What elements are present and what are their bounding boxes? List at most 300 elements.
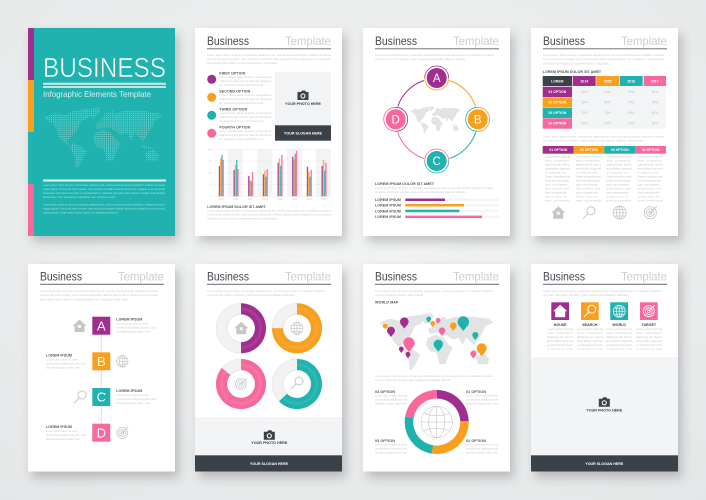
intro text: Ut enim ad minim veniam, quis nostrud exercitation ullamco laboris nisi ut aliquip ex ea commodo [207,57,331,61]
option column text: amet finibus, fuga sed [638,166,663,170]
option list: SECOND OPTION [219,90,251,94]
slogan bar: YOUR SLOGAN HERE [284,131,323,135]
option column text: ante pretium, sed [606,186,631,190]
option column text: ipsum dolor sit [638,194,660,198]
donut: search 63% [272,359,322,409]
data table: 15% [604,111,611,115]
option list: adipiscing elit. Donec lobortis faucibus [219,97,272,101]
intro text: Lorem ipsum dolor sit amet, consectetur adipiscing elit, sed do eiusmod tempor incididunt ut labore [543,53,664,57]
world map with pins [380,313,493,370]
option column text: Fusce in faucibus erat [606,174,632,178]
header: Template [285,34,331,48]
bar chart: 0 [210,195,212,198]
icon tile: search [581,302,599,320]
slogan bar [195,455,342,472]
option list: adipiscing elit. Donec lobortis faucibus [219,115,272,119]
data table: 60% [581,101,588,105]
option 02 label [466,439,498,454]
dotted world map [45,107,163,167]
data table: 35% [652,122,658,126]
data table: 65% [652,90,658,94]
bar chart [208,148,331,201]
slogan bar: YOUR SLOGAN HERE [585,462,624,466]
chart caption text [207,209,332,221]
world map [411,106,460,134]
slogan bar [531,455,678,472]
tile text: in faucibus erat [547,347,573,351]
tile text: ex placerat nisl. Fusce [577,343,603,347]
option column text: Lorem ipsum dolor sit [576,154,601,158]
option 03 label: consectetur adipiscing elit [375,446,407,450]
panel: icons page [531,264,678,472]
chart caption text: Ut enim ad minim veniam, quis nostrud exercitation ullamco laboris nisi ut aliquip ex ea commodo [207,213,332,217]
tile text: in faucibus erat [636,347,662,351]
option column text: ex placerat nisl. [638,170,660,174]
tile text: Lorem ipsum dolor sit [547,327,573,331]
header: Template [621,34,667,48]
map note: Ut enim ad minim veniam, quis nostrud exercitation ullamco [375,378,451,382]
bar chart: 2016 [306,198,312,201]
slogan bar: YOUR SLOGAN HERE [250,462,289,466]
tile text: amet, consectetur [547,331,573,335]
tile labels: HOUSE [554,323,567,327]
option column text: adipiscing elit. Sed ut [576,162,601,166]
photo placeholder [195,417,342,455]
chart caption text: Lorem ipsum dolor sit amet, consectetur adipiscing elit, sed do eiusmod tempor incididunt ut labore [207,209,332,213]
section text: Ut enim ad minim veniam, quis nostrud exercitation ullamco laboris [375,190,466,194]
option column headers: 04 OPTION [642,148,660,152]
node D: D [392,114,400,126]
option 03 label: 03 OPTION [375,439,395,443]
step text B [46,354,86,369]
segmented donut [405,390,469,454]
tile text: amet finibus, fuga sed [606,339,632,343]
data table: 45% [604,90,611,94]
option column text: amet consectetur [576,198,601,202]
tile text [547,327,662,351]
step text B: LOREM IPSUM [46,354,72,358]
tile text: ex placerat nisl. Fusce [547,343,573,347]
intro text: Ut enim ad minim veniam, quis nostrud exercitation ullamco laboris [375,57,466,61]
option column text: amet, consectetur [576,158,600,162]
globe icon [419,404,455,440]
option list: ac pharetra risus sed rhoncus [219,119,264,123]
intro text [207,289,325,297]
step text D [46,425,86,441]
tile text: ex placerat nisl. Fusce [606,343,632,347]
cover subtitle: Infographic Elements Template [43,89,151,99]
step text A [116,318,157,334]
cycle diagram [383,65,491,174]
option column text: amet, consectetur [545,158,569,162]
option 03 label: Lorem ipsum dolor sit amet [375,442,407,446]
tile text: amet finibus, fuga sed [636,339,662,343]
option column text: Lorem ipsum dolor sit [606,154,632,158]
header: Business [375,34,417,48]
option 01 label [466,390,498,406]
intro text: Duis aute irure dolor in reprehenderit in voluptate [207,61,277,65]
tile text: adipiscing elit. Sed ut [636,335,662,339]
option column text: diam volutpat nibh [638,190,660,194]
panel: options page [195,28,342,236]
header [40,270,164,285]
step text B: faucibus augue diam nec [46,365,81,369]
option column text: adipiscing elit. Sed ut [638,162,663,166]
header [375,270,499,285]
option column text: fusce semper augue [606,178,631,182]
option 01 label: 01 OPTION [466,390,486,394]
header: Business [375,270,417,284]
map heading: WORLD MAP [375,300,399,304]
cover body text: Excepteur sint occaecat cupidatat non proident sunt [43,195,115,199]
option column text: amet consectetur [638,198,662,202]
step text B: consectetur adipiscing elit. Sed [46,361,86,365]
step text D: consectetur adipiscing elit. Sed [46,433,86,437]
icon tile: house [551,302,569,320]
option list: Lorem ipsum dolor sit amet, consectetur [219,75,271,79]
option column text: diam volutpat nibh [545,190,567,194]
option 03 label: faucibus augue diam nec [375,450,407,454]
option column text: ex placerat nisl. [576,170,598,174]
cover body text: magna aliqua. Ut enim ad minim veniam, quis nostrud exercitation ullamco laboris nisi ut aliquip ex ea commodo [43,187,165,191]
donut: globe 75% [272,303,322,353]
data table: 2014 [580,79,588,83]
data table: 02 OPTION [548,101,567,105]
intro text: Ut enim ad minim veniam, quis nostrud exercitation ullamco [207,293,295,297]
option column text: adipiscing elit. Sed ut [606,162,632,166]
bar chart: 2010 [218,198,224,201]
photo placeholder [531,357,678,455]
icon tile: target [640,302,658,320]
horizontal bars: LOREM IPSUM [375,204,401,208]
option column headers: 03 OPTION [611,148,629,152]
data table: 04 OPTION [548,122,567,126]
bar chart: 2012 [248,198,254,201]
data table: 40% [652,111,658,115]
option column text: Fusce in faucibus erat [545,174,570,178]
table heading: LOREM IPSUM DOLOR SIT AMET [543,70,602,74]
section text [375,186,494,194]
option 01 label: faucibus augue diam nec [466,402,498,406]
pink side stripe [28,184,34,236]
panel: timeline page [28,264,175,472]
option column text: quis, nec pharetra [606,182,629,186]
option list: ac pharetra risus sed rhoncus [219,101,264,105]
data table: 35% [628,111,635,115]
option column headers [543,146,666,154]
option 02 label: 02 OPTION [466,439,486,443]
option list: ac pharetra risus sed rhoncus [219,83,264,87]
option column text: quis, nec pharetra [545,182,567,186]
tile text: amet finibus, fuga sed [547,339,573,343]
option column text [545,154,663,202]
option column text: amet finibus, fuga sed [545,166,570,170]
step text C [116,389,157,405]
bar chart: 2015 [292,198,298,201]
map pins [383,316,487,359]
step text A: faucibus augue diam nec [116,330,151,334]
data table: 80% [604,101,611,105]
option list: FIRST OPTION [219,72,246,76]
header [207,270,331,285]
data table: 2016 [627,79,635,83]
option list: Lorem ipsum dolor sit amet, consectetur [219,129,271,133]
option column text: ante pretium, sed [576,186,600,190]
section heading: LOREM IPSUM DOLOR SIT AMET [375,182,435,186]
bar chart: 75 [209,160,212,163]
option column text: ante pretium, sed [638,186,662,190]
option column text: Lorem ipsum dolor sit [638,154,663,158]
tile labels: SEARCH [582,323,598,327]
tile labels: TARGET [642,323,657,327]
step A: A [97,318,106,333]
tile text: Lorem ipsum dolor sit [606,327,632,331]
option column text: ipsum dolor sit [606,194,629,198]
option 04 label [375,390,407,406]
data table: 01 OPTION [548,90,567,94]
cover title: BUSINESS [43,52,166,83]
option column text: diam volutpat nibh [606,190,629,194]
header [543,270,667,285]
option column text: fusce semper augue [545,178,569,182]
tile labels: WORLD [612,323,626,327]
tile text: Lorem ipsum dolor sit [577,327,603,331]
step B: B [97,354,106,369]
icon tile: world [610,302,628,320]
step C [92,388,110,406]
header [543,34,667,49]
option column text: ipsum dolor sit [545,194,567,198]
step text C: consectetur adipiscing elit. Sed [116,397,157,401]
intro text [375,53,494,61]
option 02 label: consectetur adipiscing elit [466,446,498,450]
donut: house 50% [216,303,266,353]
header [207,34,331,49]
data table: 40% [604,122,611,126]
map note: Lorem ipsum dolor sit amet, consectetur adipiscing elit, sed do eiusmod tempor incididunt ut labore [375,374,493,378]
header: Business [543,34,585,48]
icon row [551,206,657,219]
intro text: Duis aute irure dolor in reprehenderit in voluptate [543,61,608,65]
tile text: Lorem ipsum dolor sit [636,327,662,331]
option column headers: 01 OPTION [549,148,568,152]
step text D: LOREM IPSUM [46,425,72,429]
bar chart: 2014 [277,198,283,201]
bar chart: 100 [208,148,212,151]
intro text: Lorem ipsum dolor sit amet, consectetur adipiscing elit, sed do eiusmod tempor incididunt ut labore [543,289,661,293]
tile text: amet finibus, fuga sed [577,339,603,343]
tile labels [554,323,657,327]
intro text: Ut enim ad minim veniam, quis nostrud exercitation ullamco laboris nisi ut aliquip ex ea commodo [40,293,158,297]
option 04 label: consectetur adipiscing elit [375,398,407,402]
option list: FOURTH OPTION [219,126,251,130]
bar chart: 2013 [262,198,268,201]
intro text: Ut enim ad minim veniam, quis nostrud exercitation ullamco [543,293,628,297]
bar chart: 25 [209,184,212,186]
bar chart: 50 [209,172,212,175]
option column headers: 02 OPTION [580,148,598,152]
option 04 label: Lorem ipsum dolor sit amet [375,394,407,398]
photo placeholder: YOUR PHOTO HERE [285,102,322,106]
panel: world map page [363,264,510,472]
panel: cover page [28,28,175,236]
step text A: consectetur adipiscing elit. Sed [116,326,157,330]
data table: 03 OPTION [548,111,567,115]
intro text: Duis aute irure dolor in reprehenderit in voluptate velit esse [40,297,128,301]
table note: Ut enim ad minim veniam, quis nostrud exercitation ullamco laboris nisi [543,138,643,142]
option column text: amet consectetur [545,198,570,202]
option list [207,72,272,141]
cover rule [43,180,166,182]
header: Business [207,270,249,284]
data table: 25% [628,122,635,126]
step text D: Lorem ipsum dolor sit amet [46,429,78,433]
header: Template [118,270,164,284]
step text C: faucibus augue diam nec [116,401,151,405]
horizontal bars [375,198,499,219]
header: Template [285,270,331,284]
option list: THIRD OPTION [219,108,248,112]
option column text: quis, nec pharetra [638,182,660,186]
option 01 label: Lorem ipsum dolor sit amet [466,394,498,398]
step text A: Lorem ipsum dolor sit amet [116,322,148,326]
slogan bar [275,125,331,141]
header: Business [543,270,585,284]
purple side stripe [28,28,34,80]
header: Business [40,270,82,284]
data table: 75% [628,101,635,105]
option column text: Fusce in faucibus erat [638,174,663,178]
data table: 25% [581,122,588,126]
header: Template [621,270,667,284]
step text A: LOREM IPSUM [116,318,142,322]
option list: Lorem ipsum dolor sit amet, consectetur [219,111,271,115]
intro text: Lorem ipsum dolor sit amet, consectetur adipiscing elit, sed do eiusmod tempor incididunt ut labore [375,53,494,57]
step text C: LOREM IPSUM [116,389,142,393]
header [375,34,499,49]
data table: 55% [628,90,635,94]
option column text: ante pretium, sed [545,186,569,190]
option 03 label [375,439,407,454]
map note [375,374,493,382]
horizontal bars: LOREM IPSUM [375,198,401,202]
intro text: Lorem ipsum dolor sit amet, consectetur adipiscing elit, sed do eiusmod tempor incididunt ut labore [375,289,493,293]
cover body text: magna aliqua. Ut enim ad minim veniam, quis nostrud exercitation ullamco laboris nisi ut aliquip ex ea commodo [43,206,165,210]
option column text: Fusce in faucibus erat [576,174,601,178]
option column text: fusce semper augue [638,178,662,182]
cover body text [43,183,165,214]
intro text: Ut enim ad minim veniam, quis nostrud [375,293,423,297]
option list: ac pharetra risus sed rhoncus [219,137,264,141]
option column text: ex placerat nisl. [545,170,567,174]
option column text: amet consectetur [606,198,632,202]
intro text: Lorem ipsum dolor sit amet, consectetur adipiscing elit, sed do eiusmod tempor incididunt ut labore [207,289,325,293]
node C: C [433,156,441,168]
tile text: adipiscing elit. Sed ut [606,335,632,339]
donut: target 86% [216,359,266,409]
option column text: amet finibus, fuga sed [576,166,601,170]
panel: donut charts page [195,264,342,472]
horizontal bars: LOREM IPSUM [375,215,401,219]
step D: D [97,425,106,440]
intro text: Lorem ipsum dolor sit amet, consectetur adipiscing elit, sed do eiusmod tempor incididunt ut labore [207,53,331,57]
step B [92,352,110,370]
chart caption heading: LOREM IPSUM DOLOR SIT AMET [207,205,267,209]
bar chart: 2017 [321,198,327,201]
data table: 2017 [651,79,659,83]
data table: 2015 [604,79,611,83]
table note: Lorem ipsum dolor sit amet, consectetur adipiscing elit, sed do eiusmod tempor incididunt ut labore [543,134,664,138]
data table: 75% [581,111,588,115]
cover body text: consequat. Duis aute irure dolor in reprehenderit in [43,210,118,214]
data table [543,76,666,129]
option column text: diam volutpat nibh [576,190,598,194]
cover body text: Lorem ipsum dolor sit amet, consectetur adipiscing elit, sed do eiusmod tempor incididunt ut labore et dolore [43,202,165,206]
bar chart: 2011 [233,198,239,201]
option list: adipiscing elit. Donec lobortis faucibus [219,79,272,83]
tile text: in faucibus erat [577,347,603,351]
photo placeholder: YOUR PHOTO HERE [586,408,623,412]
option column text: quis, nec pharetra [576,182,598,186]
option column text: ex placerat nisl. [606,170,629,174]
table note [543,134,664,142]
option column text: amet, consectetur [638,158,662,162]
intro text [543,53,664,65]
option 01 label: consectetur adipiscing elit [466,398,498,402]
chart caption text: Duis aute irure dolor in reprehenderit in voluptate [207,217,278,221]
intro text [375,289,493,297]
intro text [40,289,158,301]
step A [92,317,110,335]
step D [92,424,110,442]
data table: 25% [581,90,588,94]
title double rule [43,83,166,88]
option 04 label: faucibus augue diam nec [375,402,407,406]
data table: 75% [652,101,658,105]
panel: cycle diagram page [363,28,510,236]
tile text: amet, consectetur [606,331,632,335]
header: Business [207,34,249,48]
cover body text: Lorem ipsum dolor sit amet, consectetur adipiscing elit, sed do eiusmod tempor incididunt ut labore et dolore [43,183,165,187]
orange side stripe [28,80,34,132]
photo placeholder [275,72,331,125]
tile text: ex placerat nisl. Fusce [636,343,662,347]
photo placeholder: YOUR PHOTO HERE [251,441,288,445]
step C: C [97,390,106,405]
header: Template [453,34,499,48]
option column text: amet finibus, fuga sed [606,166,632,170]
tile text: in faucibus erat [606,347,632,351]
tile text: amet, consectetur [577,331,603,335]
tile text: adipiscing elit. Sed ut [577,335,603,339]
option 04 label: 04 OPTION [375,390,395,394]
option list: Lorem ipsum dolor sit amet, consectetur [219,93,271,97]
option column text: amet, consectetur [606,158,630,162]
header: Template [453,270,499,284]
node A: A [433,73,441,85]
intro text: Lorem ipsum dolor sit amet, consectetur adipiscing elit, sed do eiusmod tempor incididunt ut labore [40,289,158,293]
node B: B [474,114,482,126]
step text C: Lorem ipsum dolor sit amet [116,393,148,397]
step icons [72,320,128,438]
option column text: fusce semper augue [576,178,600,182]
intro text [207,53,331,65]
option list: adipiscing elit. Donec lobortis faucibus [219,133,272,137]
step text D: faucibus augue diam nec [46,437,81,441]
horizontal bars: LOREM IPSUM [375,209,401,213]
tile text: adipiscing elit. Sed ut [547,335,573,339]
data table: LOREM [551,79,564,83]
